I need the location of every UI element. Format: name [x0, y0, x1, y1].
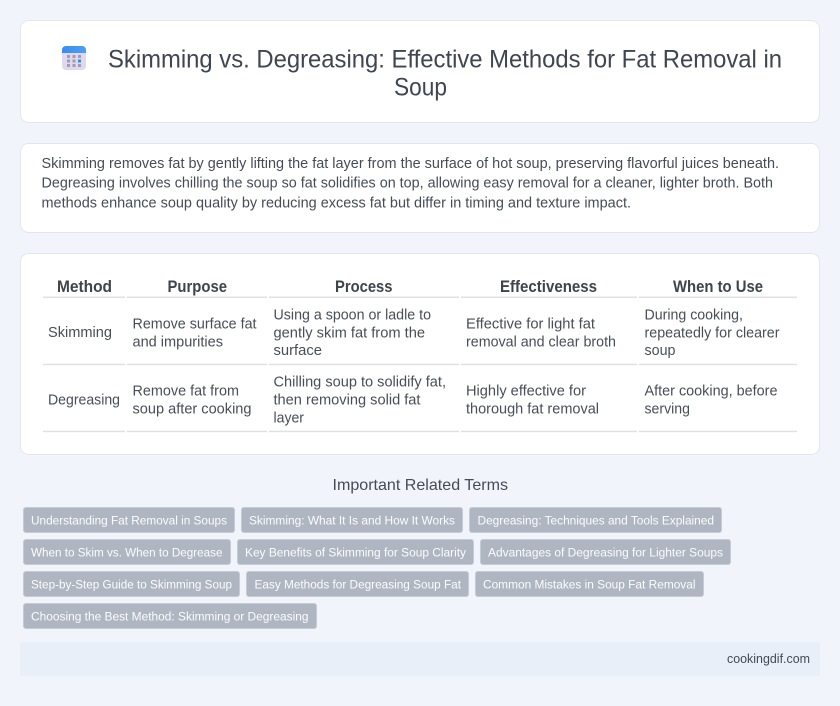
heading: related terms: Important Related Terms: [332, 477, 508, 494]
table row: degreasing: Remove fat from: [132, 382, 239, 400]
title: Soup: [394, 74, 447, 102]
tag: [238, 540, 474, 564]
tag: [24, 604, 316, 628]
tag: [480, 540, 730, 564]
table header row: When to Use: [673, 278, 763, 296]
tag: [24, 508, 234, 532]
table row: skimming: Effective for light fat: [466, 316, 596, 332]
tag: Easy Methods for Degreasing Soup Fat: [254, 577, 462, 591]
table row: degreasing: Highly effective for: [466, 382, 586, 400]
table row: degreasing: serving: [644, 400, 690, 418]
table row: skimming: repeatedly for clearer: [644, 324, 780, 342]
table row: skimming: soup: [644, 342, 676, 359]
tag: [24, 540, 230, 564]
table row: skimming: surface: [274, 342, 322, 359]
table header row: [57, 278, 763, 296]
footer: cookingdif.com: [727, 651, 810, 666]
tag: [242, 508, 462, 532]
table row: degreasing: Chilling soup to solidify fat,: [274, 374, 446, 390]
title: [108, 46, 782, 102]
tag list: related terms: [24, 508, 730, 628]
table row: degreasing: layer: [274, 410, 304, 426]
table header row: Process: [335, 278, 392, 296]
tag: [24, 572, 240, 596]
tag: [476, 572, 704, 596]
text block: introduction: Degreasing involves chilling the soup so fat solidifies on top, allowing easy removal for a cleaner, lighter broth. Both: [42, 174, 773, 192]
table row: skimming: [48, 306, 780, 359]
panel: header: [20, 20, 820, 122]
table row: skimming: During cooking,: [644, 306, 743, 324]
table row: skimming: gently skim fat from the: [274, 324, 425, 342]
table row: skimming: Remove surface fat: [132, 316, 257, 332]
tag: Common Mistakes in Soup Fat Removal: [483, 577, 696, 591]
table row: degreasing: After cooking, before: [644, 382, 778, 400]
tag: Key Benefits of Skimming for Soup Clarity: [245, 545, 467, 559]
tag: When to Skim vs. When to Degrease: [31, 545, 223, 559]
panel: comparison table: [20, 254, 820, 454]
table row: degreasing: then removing solid fat: [274, 392, 421, 408]
tag: [470, 508, 722, 532]
tag: Skimming: What It Is and How It Works: [249, 513, 455, 527]
table row: degreasing: soup after cooking: [132, 400, 252, 418]
text block: introduction: [42, 155, 779, 212]
tag: Step-by-Step Guide to Skimming Soup: [31, 577, 232, 591]
table row: degreasing: thorough fat removal: [466, 400, 599, 418]
footer: [20, 642, 820, 676]
tag: [246, 572, 468, 596]
icon: calendar: [62, 46, 86, 70]
table row: skimming: and impurities: [132, 334, 223, 350]
table row: skimming: removal and clear broth: [466, 334, 616, 350]
text block: introduction: methods enhance soup quality by reducing excess fat but differ in timing and texture impact.: [42, 194, 631, 212]
table row: skimming: Using a spoon or ladle to: [274, 306, 431, 324]
table row: degreasing: [48, 374, 778, 426]
table row: skimming: Skimming: [48, 324, 112, 341]
table row: degreasing: Degreasing: [48, 392, 120, 408]
table header row: Purpose: [168, 278, 227, 296]
table header row: Method: [57, 278, 112, 296]
tag: Understanding Fat Removal in Soups: [31, 513, 227, 527]
tag: Choosing the Best Method: Skimming or Degreasing: [31, 609, 309, 623]
tag: Advantages of Degreasing for Lighter Soups: [488, 545, 723, 559]
table header row: Effectiveness: [500, 278, 597, 296]
text block: introduction: Skimming removes fat by gently lifting the fat layer from the surface of hot soup, preserving flavorful juices beneath.: [42, 155, 779, 172]
tag: Degreasing: Techniques and Tools Explained: [478, 513, 714, 527]
title: Skimming vs. Degreasing: Effective Methods for Fat Removal in: [108, 46, 782, 74]
panel: introduction: [20, 144, 820, 232]
